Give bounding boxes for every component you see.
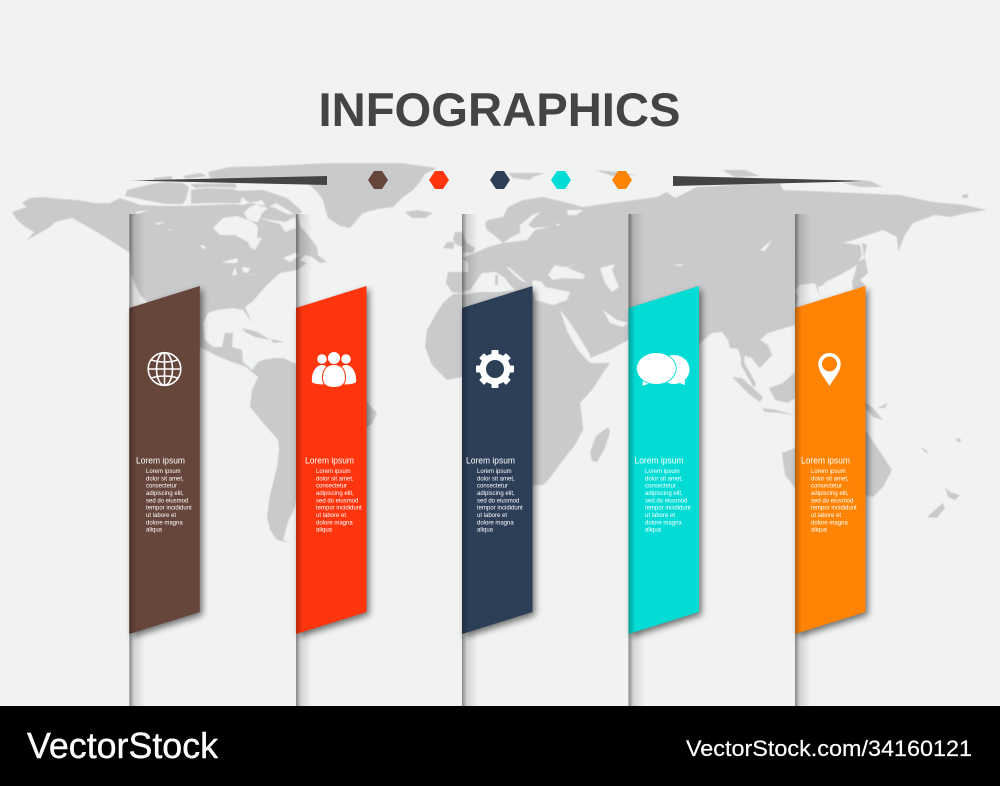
hexagon: orange bbox=[612, 171, 632, 189]
column shadow bbox=[795, 214, 811, 706]
panel heading: Lorem ipsum bbox=[466, 456, 515, 466]
panel bbox=[462, 286, 532, 634]
panel shadow bbox=[132, 289, 202, 637]
panel body text: dolore magna bbox=[811, 520, 848, 526]
icon: globe bbox=[148, 353, 181, 385]
map: adriatic sea bbox=[506, 267, 527, 283]
icon: chat bubbles bbox=[637, 353, 690, 386]
panel body text: adipiscing elit, bbox=[146, 491, 184, 497]
map: australia bbox=[782, 425, 892, 497]
panel body text: ut labore et bbox=[811, 513, 841, 519]
panel body text: consectetur bbox=[146, 484, 177, 490]
map: africa bbox=[425, 290, 610, 485]
panel body text: dolor sit amet, bbox=[316, 476, 354, 482]
map: iceland bbox=[405, 210, 433, 218]
column shadow bbox=[296, 214, 312, 706]
panel body text: aliqua bbox=[645, 528, 662, 534]
panel bbox=[628, 286, 699, 634]
panel shadow bbox=[299, 289, 369, 637]
column 4: teal bbox=[628, 214, 702, 706]
panel body text: Lorem ipsum bbox=[645, 469, 680, 475]
hexagon: navy bbox=[490, 171, 510, 189]
panel body text: adipiscing elit, bbox=[316, 491, 354, 497]
panel bbox=[296, 286, 366, 634]
map: madagascar bbox=[590, 427, 610, 462]
map: small pacific islands bbox=[920, 194, 968, 453]
column shadow bbox=[628, 214, 644, 706]
footer image id: VectorStock.com/34160121 bbox=[686, 736, 972, 761]
map: black sea and caspian sea bbox=[548, 263, 619, 292]
column shadow bbox=[129, 214, 145, 706]
icon: location pin bbox=[818, 353, 841, 386]
panel body text: dolore magna bbox=[316, 520, 353, 526]
world map bbox=[12, 163, 987, 543]
panel body text: dolor sit amet, bbox=[811, 476, 849, 482]
panel body text: ut labore et bbox=[645, 513, 675, 519]
panel body text: consectetur bbox=[316, 484, 347, 490]
map: eurasia bbox=[446, 183, 987, 388]
panel body text: consectetur bbox=[645, 484, 676, 490]
footer logo: VectorStock bbox=[27, 725, 219, 766]
panel heading: Lorem ipsum bbox=[801, 456, 850, 466]
map: greenland and ellesmere bbox=[208, 163, 437, 228]
map: great lakes bbox=[135, 210, 262, 277]
right wedge bar bbox=[673, 176, 875, 186]
panel body text: dolore magna bbox=[645, 520, 682, 526]
map: new zealand bbox=[927, 487, 960, 518]
map: svalbard and novaya zemlya bbox=[508, 170, 637, 180]
panel body text: sed do eiusmod bbox=[477, 498, 519, 504]
panel body text: ut labore et bbox=[477, 513, 507, 519]
panel body text: dolor sit amet, bbox=[146, 476, 184, 482]
panel body text: tempor incididunt bbox=[645, 506, 691, 512]
map: sardinia bbox=[495, 275, 498, 285]
panel body text: aliqua bbox=[811, 528, 828, 534]
hexagon row bbox=[368, 171, 632, 189]
map: north russian islands bbox=[722, 170, 883, 187]
panel body text: ut labore et bbox=[146, 513, 176, 519]
panel body text: adipiscing elit, bbox=[811, 491, 849, 497]
map: persian gulf bbox=[603, 310, 628, 327]
panel body text: sed do eiusmod bbox=[811, 498, 853, 504]
panel shadow bbox=[798, 289, 868, 637]
map: sea of japan bbox=[818, 284, 826, 297]
panel body text: tempor incididunt bbox=[316, 506, 362, 512]
panel body text: tempor incididunt bbox=[477, 506, 523, 512]
hexagon: red bbox=[429, 171, 449, 189]
panel body text: tempor incididunt bbox=[811, 506, 857, 512]
map: eastern mediterranean bbox=[532, 280, 570, 305]
map: western mediterranean bbox=[462, 272, 515, 295]
panel heading: Lorem ipsum bbox=[305, 456, 354, 466]
panel body text: aliqua bbox=[316, 528, 333, 534]
panel body text: consectetur bbox=[477, 484, 508, 490]
icon: people bbox=[312, 352, 356, 388]
panel body text: Lorem ipsum bbox=[316, 469, 351, 475]
column 5: orange bbox=[795, 214, 868, 706]
map: red sea bbox=[560, 310, 590, 362]
column 3: navy bbox=[462, 214, 535, 706]
map: hudson bay and foxe basin bbox=[213, 204, 296, 250]
panel body text: adipiscing elit, bbox=[645, 491, 683, 497]
map: britain and ireland bbox=[443, 232, 475, 253]
left wedge bar bbox=[125, 176, 327, 185]
panel shadow bbox=[465, 289, 535, 637]
map: borneo bbox=[769, 372, 795, 403]
map: gulf of st lawrence bbox=[283, 253, 300, 262]
panel body text: sed do eiusmod bbox=[316, 498, 358, 504]
map: south china sea notch bbox=[745, 356, 758, 367]
map: caribbean islands bbox=[242, 328, 285, 343]
panel body text: sed do eiusmod bbox=[645, 498, 687, 504]
map: north and south america bbox=[12, 197, 377, 543]
panel body text: tempor incididunt bbox=[146, 506, 192, 512]
panel body text: dolore magna bbox=[477, 520, 514, 526]
panel bbox=[129, 286, 200, 634]
panel body text: adipiscing elit, bbox=[477, 491, 515, 497]
panel body text: aliqua bbox=[477, 528, 494, 534]
panel body text: sed do eiusmod bbox=[146, 498, 188, 504]
panel body text: Lorem ipsum bbox=[146, 469, 181, 475]
panel body text: ut labore et bbox=[316, 513, 346, 519]
panel body text: Lorem ipsum bbox=[811, 469, 846, 475]
hexagon: teal bbox=[551, 171, 571, 189]
panel body text: dolor sit amet, bbox=[645, 476, 683, 482]
panel body text: Lorem ipsum bbox=[477, 469, 512, 475]
map: new guinea bbox=[865, 402, 888, 420]
column 1: brown bbox=[129, 214, 202, 706]
footer bar bbox=[0, 706, 1000, 786]
panel body text: dolore magna bbox=[146, 520, 183, 526]
panel body text: consectetur bbox=[811, 484, 842, 490]
panel shadow bbox=[632, 289, 702, 637]
column 2: red bbox=[296, 214, 369, 706]
map: baltic and white sea bbox=[503, 210, 583, 243]
icon: gear bbox=[476, 350, 514, 388]
map: arctic islands bbox=[125, 173, 303, 215]
panel body text: aliqua bbox=[146, 528, 163, 534]
map: siberian lake details bbox=[673, 240, 772, 266]
panel heading: Lorem ipsum bbox=[136, 456, 185, 466]
column shadow bbox=[462, 214, 478, 706]
panel bbox=[795, 286, 866, 634]
map: sumatra and java bbox=[732, 377, 795, 415]
panel body text: dolor sit amet, bbox=[477, 476, 515, 482]
map: japan and sakhalin bbox=[852, 243, 868, 290]
title: INFOGRAPHICS bbox=[318, 84, 680, 137]
hexagon: brown bbox=[368, 171, 388, 189]
panel heading: Lorem ipsum bbox=[634, 456, 684, 466]
